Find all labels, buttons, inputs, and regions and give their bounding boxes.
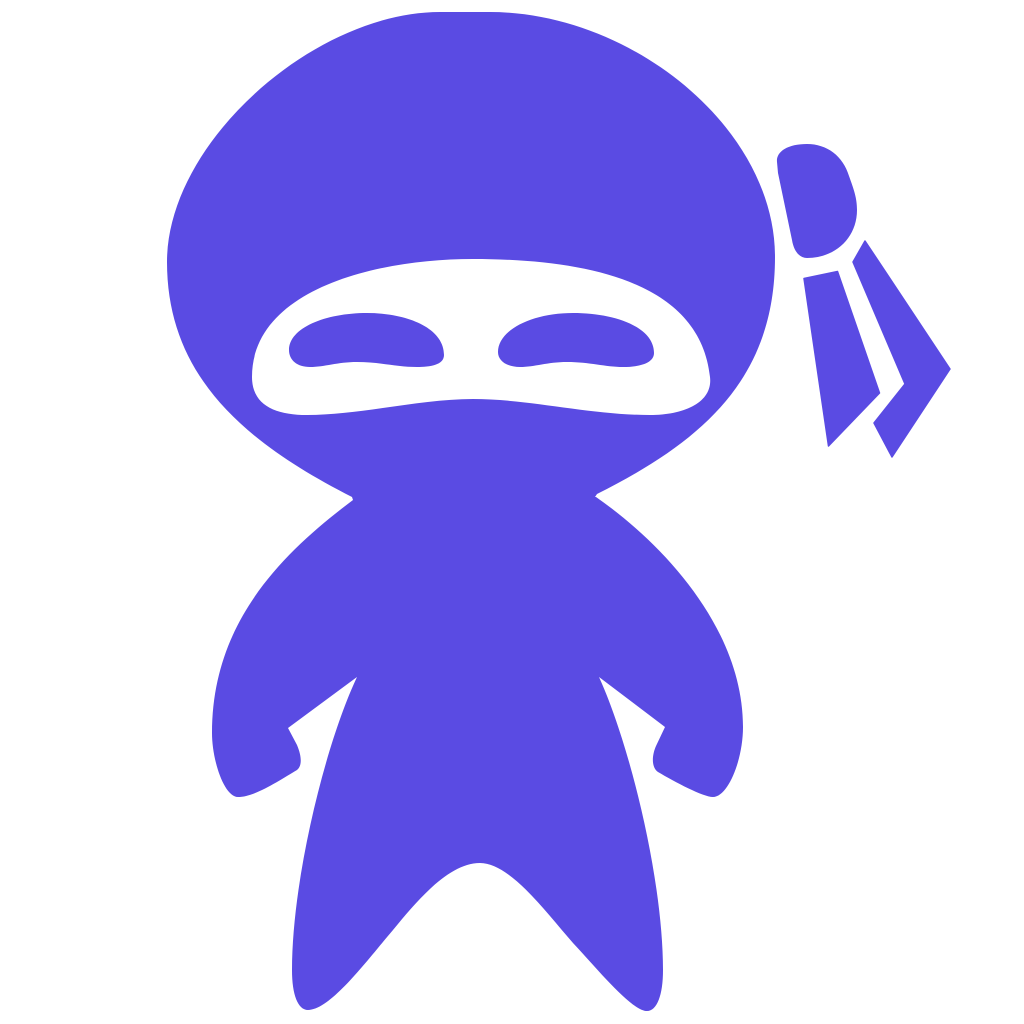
left eye — [289, 313, 444, 367]
headband tail right — [853, 241, 950, 457]
mask opening — [252, 259, 710, 415]
headband tail left — [804, 272, 880, 446]
right eye — [498, 313, 654, 367]
headband knot — [777, 144, 857, 258]
ninja body and head — [167, 12, 775, 1011]
icon: ninja mascot — [167, 12, 950, 1011]
